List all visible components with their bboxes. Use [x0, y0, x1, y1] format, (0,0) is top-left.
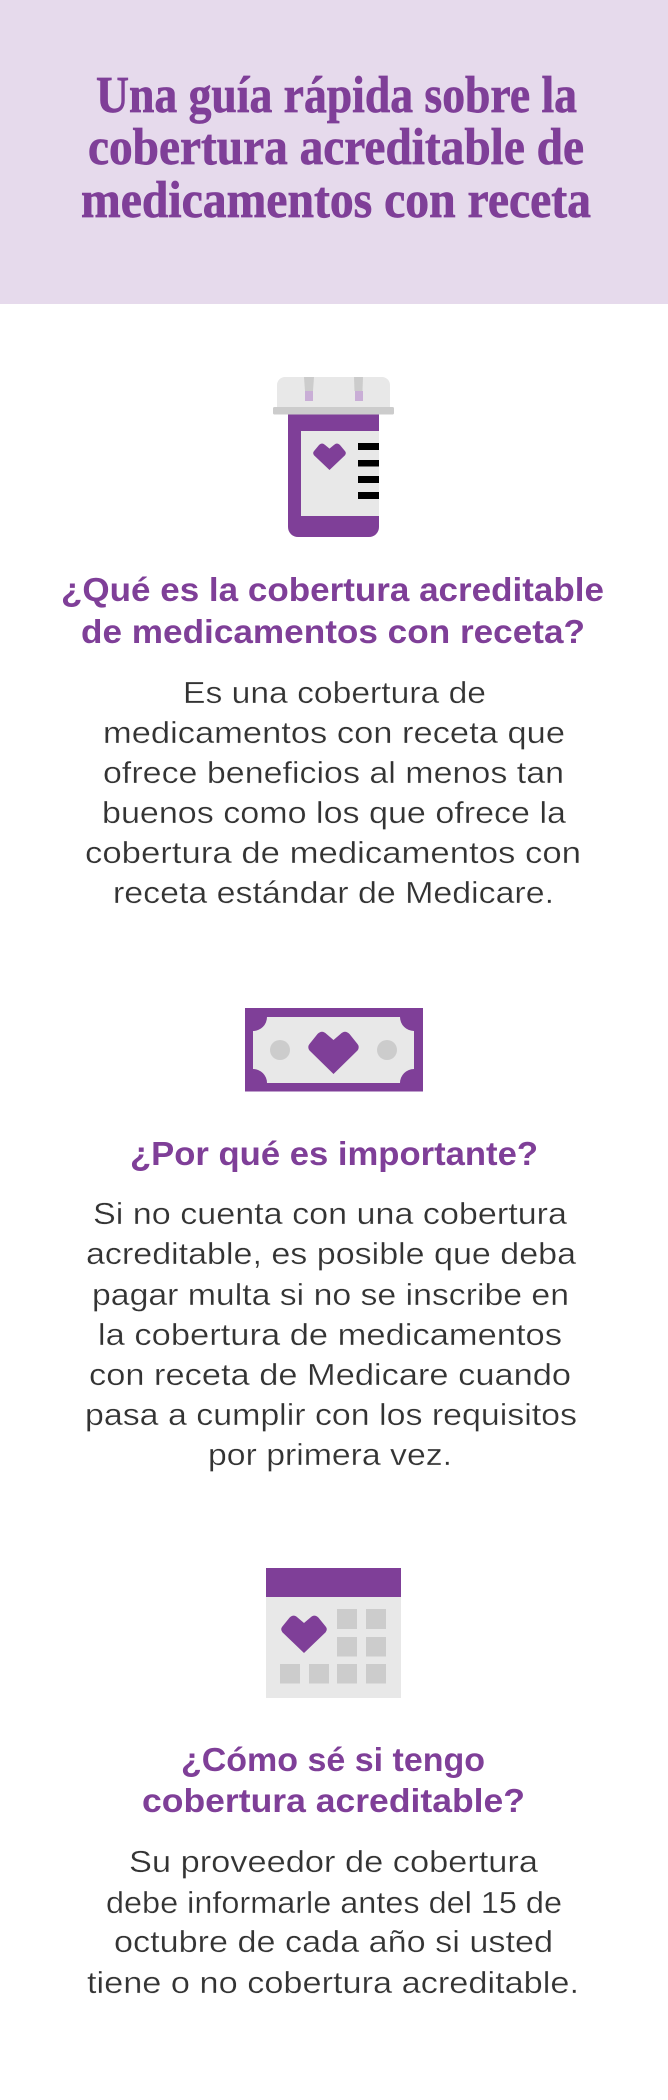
text block: provider notice: debe informarle antes del 15 de — [106, 1885, 562, 1920]
heading: what is it — [61, 571, 604, 650]
icon: pill bottle — [273, 377, 394, 537]
text block: penalty explanation: pasa a cumplir con los requisitos — [85, 1397, 577, 1432]
text block: definition: medicamentos con receta que — [103, 715, 565, 750]
text block: definition: receta estándar de Medicare. — [113, 875, 554, 910]
text block: penalty explanation — [85, 1196, 577, 1472]
text block: penalty explanation: con receta de Medicare cuando — [89, 1357, 571, 1392]
text block: penalty explanation: Si no cuenta con una cobertura — [93, 1196, 568, 1231]
title: cobertura acreditable de — [88, 119, 584, 176]
text block: penalty explanation: pagar multa si no se inscribe en — [92, 1277, 569, 1312]
heading: how do I know: cobertura acreditable? — [142, 1782, 525, 1819]
text block: provider notice: Su proveedor de cobertura — [129, 1844, 539, 1879]
title: Una guía rápida sobre la — [96, 67, 577, 124]
text block: definition: Es una cobertura de — [183, 675, 486, 710]
title — [81, 67, 591, 229]
heading: why it matters: ¿Por qué es importante? — [130, 1135, 538, 1172]
text block: definition — [85, 675, 581, 910]
title: medicamentos con receta — [81, 172, 591, 229]
header banner — [0, 0, 668, 304]
text block: penalty explanation: por primera vez. — [208, 1437, 452, 1472]
panel: why it matters — [85, 1008, 577, 1472]
panel: what is creditable coverage — [61, 377, 604, 910]
text block: provider notice: octubre de cada año si usted — [114, 1924, 553, 1959]
icon: calendar — [266, 1568, 401, 1698]
icon: money bill — [245, 1008, 423, 1092]
heading: what is it: ¿Qué es la cobertura acreditable — [61, 571, 604, 608]
heading: what is it: de medicamentos con receta? — [81, 613, 585, 650]
text block: provider notice — [87, 1844, 579, 2000]
heading: how do I know: ¿Cómo sé si tengo — [181, 1741, 485, 1778]
text block: penalty explanation: acreditable, es posible que deba — [86, 1236, 577, 1271]
text block: definition: cobertura de medicamentos con — [85, 835, 581, 870]
text block: penalty explanation: la cobertura de medicamentos — [98, 1317, 562, 1352]
text block: provider notice: tiene o no cobertura acreditable. — [87, 1965, 579, 2000]
heading: how do I know — [142, 1741, 525, 1819]
text block: definition: buenos como los que ofrece la — [102, 795, 567, 830]
text block: definition: ofrece beneficios al menos tan — [103, 755, 564, 790]
panel: how do I know — [87, 1568, 579, 2000]
